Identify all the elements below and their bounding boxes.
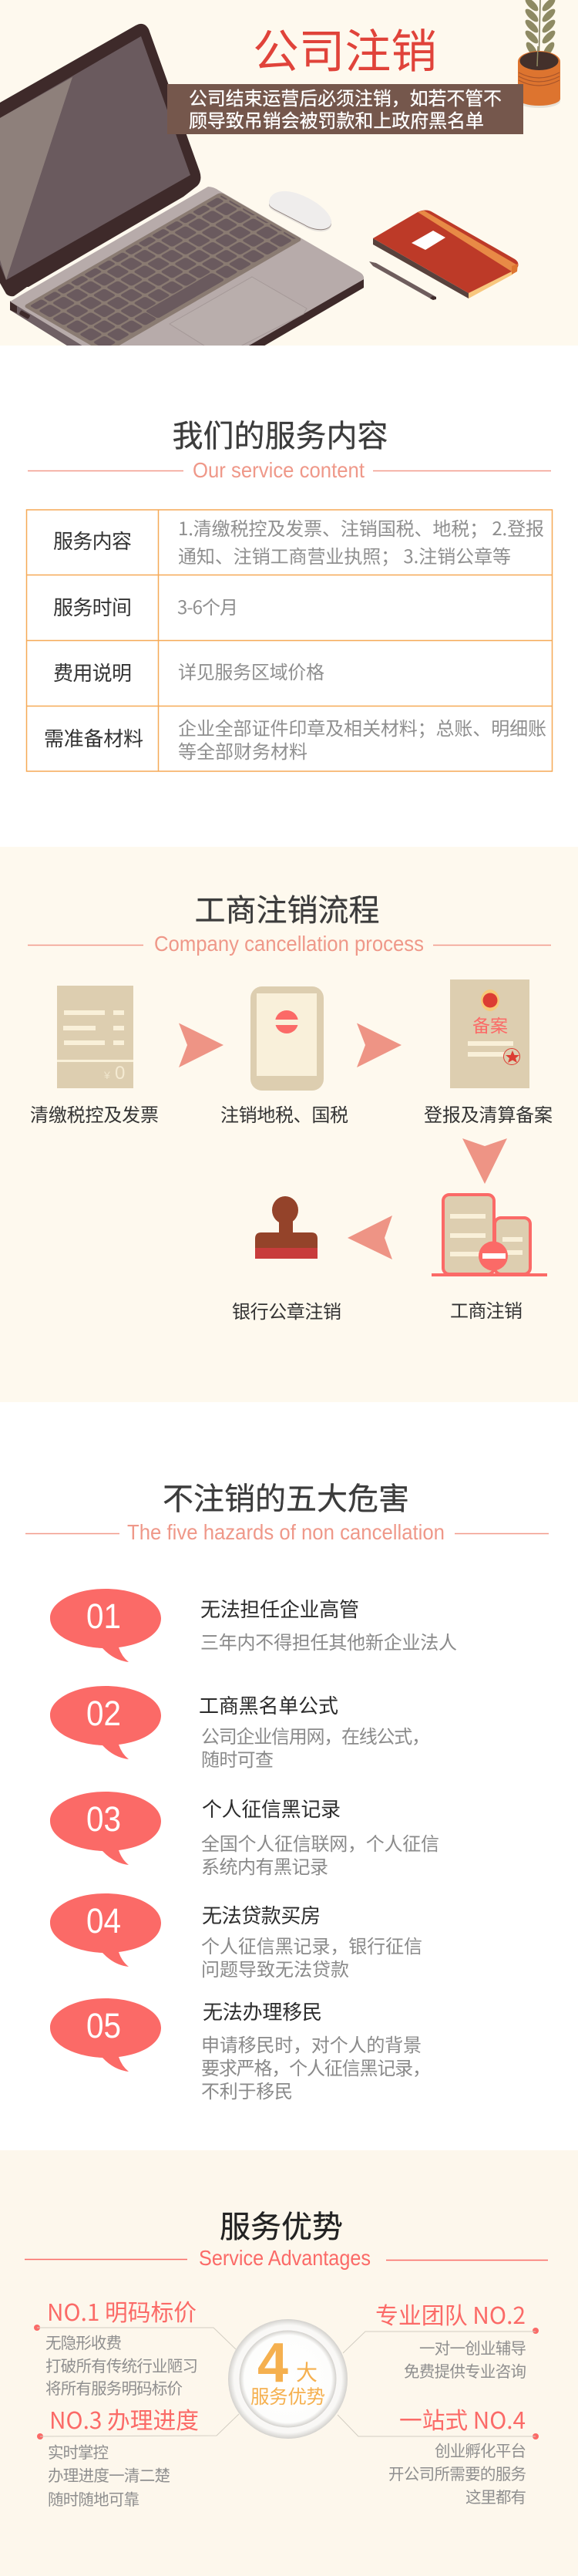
row: service content: 1.清缴税控及发票、注销国税、地税； 2.登报 <box>178 514 544 541</box>
advantage: no.2: 一对一创业辅导 <box>419 2335 526 2359</box>
item 01: 无法担任企业高管 <box>200 1594 359 1623</box>
advantage: no.2: 免费提供专业咨询 <box>404 2359 526 2382</box>
item 05: 无法办理移民 <box>203 1997 322 2025</box>
item 03 <box>50 1792 439 1879</box>
callout: subtitle band <box>167 83 523 134</box>
subheading with rules: Service Advantages <box>199 2246 371 2270</box>
icon: potted plant <box>518 0 560 108</box>
item 04: 个人征信黑记录，银行征信 <box>201 1931 422 1958</box>
subheading with rules: Company cancellation process <box>154 932 424 956</box>
row: fee: 详见服务区域价格 <box>178 657 324 684</box>
item 03: 全国个人征信联网，个人征信 <box>201 1829 439 1856</box>
item 04: 04 <box>86 1901 121 1940</box>
advantage: no.3: 办理进度一清二楚 <box>48 2463 170 2486</box>
advantage: no.3 <box>37 2402 239 2510</box>
subheading with rules: The five hazards of non cancellation <box>127 1520 445 1544</box>
icon: filing document: 备案 <box>472 1011 508 1037</box>
advantage: no.2: 专业团队 NO.2 <box>375 2297 526 2331</box>
row: materials: 需准备材料 <box>44 723 143 752</box>
step label: 清缴税控及发票 <box>30 1100 159 1127</box>
row: materials: 企业全部证件印章及相关材料；总账、明细账 <box>178 713 546 740</box>
panel: hero banner <box>0 0 578 353</box>
item 03: 个人征信黑记录 <box>202 1794 341 1822</box>
callout: subtitle band: 顾导致吊销会被罚款和上政府黑名单 <box>189 106 484 133</box>
title: 公司注销 <box>253 15 437 82</box>
row: service time: 3-6个月 <box>177 592 238 619</box>
icon: tax receipt <box>57 986 133 1088</box>
icon: mouse <box>269 191 331 231</box>
center badge <box>228 2319 348 2439</box>
item 02: 随时可查 <box>201 1745 274 1772</box>
row: fee <box>53 657 324 686</box>
icon: pen <box>369 261 436 300</box>
item 05: 申请移民时，对个人的背景 <box>201 2030 422 2057</box>
row: service content: 通知、注销工商营业执照； 3.注销公章等 <box>178 541 511 568</box>
subheading with rules: Our service content <box>193 458 365 482</box>
panel: service advantages <box>0 2150 578 2576</box>
arrow <box>348 1216 392 1259</box>
advantage: no.1: 无隐形收费 <box>45 2330 122 2353</box>
row: fee: 费用说明 <box>53 658 132 686</box>
row: materials <box>44 713 546 764</box>
advantage: no.1: 打破所有传统行业陋习 <box>45 2353 198 2376</box>
arrow <box>357 1023 402 1067</box>
row: materials: 等全部财务材料 <box>178 737 307 764</box>
item 03: 系统内有黑记录 <box>201 1852 328 1879</box>
icon: company seal <box>255 1196 318 1259</box>
panel: five hazards <box>0 1402 578 2150</box>
advantage: no.1: 将所有服务明码标价 <box>45 2375 183 2399</box>
callout: subtitle band: 公司结束运营后必须注销，如若不管不 <box>189 83 502 110</box>
row: service time <box>53 592 238 621</box>
advantage: no.4: 这里都有 <box>465 2484 526 2507</box>
step label: 登报及清算备案 <box>424 1100 553 1127</box>
advantage: no.3: NO.3 办理进度 <box>49 2402 199 2436</box>
item 01: 三年内不得担任其他新企业法人 <box>200 1627 457 1654</box>
item 05: 不利于移民 <box>201 2076 293 2103</box>
center badge: 服务优势 <box>250 2382 325 2409</box>
center badge: 4 <box>257 2332 288 2394</box>
icon: notebook <box>373 210 518 298</box>
icon: tax receipt: ¥ <box>103 1069 110 1081</box>
row: service content <box>53 514 544 568</box>
item 04: 问题导致无法贷款 <box>201 1954 349 1981</box>
item 02: 工商黑名单公式 <box>199 1691 338 1719</box>
item 04 <box>50 1893 422 1981</box>
heading: 工商注销流程 <box>194 885 379 930</box>
advantage: no.4: 一站式 NO.4 <box>399 2402 526 2436</box>
item 05: 05 <box>86 2006 121 2045</box>
row: service time: 服务时间 <box>53 592 132 621</box>
item 01: 01 <box>86 1597 121 1636</box>
item 05: 要求严格，个人征信黑记录， <box>201 2053 431 2080</box>
center badge: 大 <box>296 2356 318 2387</box>
arrow <box>179 1023 223 1067</box>
advantage: no.2 <box>343 2297 539 2382</box>
heading: 我们的服务内容 <box>173 411 388 456</box>
advantage: no.3: 实时掌控 <box>48 2439 109 2463</box>
item 02 <box>50 1686 430 1772</box>
advantage: no.4 <box>338 2402 539 2507</box>
icon: business building <box>432 1195 547 1276</box>
item 02: 02 <box>86 1694 121 1733</box>
icon: tax phone <box>250 986 324 1091</box>
heading: 不注销的五大危害 <box>163 1474 409 1519</box>
item 05 <box>50 1997 431 2103</box>
service table <box>26 510 552 771</box>
panel: service content <box>0 346 578 847</box>
advantage: no.1: NO.1 明码标价 <box>47 2294 197 2328</box>
item 02: 公司企业信用网，在线公式， <box>201 1721 430 1748</box>
icon: tax receipt: 0 <box>115 1063 125 1084</box>
step label: 银行公章注销 <box>232 1296 341 1323</box>
advantage: no.4: 开公司所需要的服务 <box>388 2461 526 2484</box>
heading: 服务优势 <box>220 2202 343 2247</box>
panel: cancellation process <box>0 847 578 1402</box>
step label: 工商注销 <box>450 1296 523 1323</box>
item 03: 03 <box>86 1799 121 1839</box>
advantage: no.4: 创业孵化平台 <box>435 2438 526 2461</box>
step label: 注销地税、国税 <box>220 1100 348 1127</box>
advantage: no.1 <box>34 2294 236 2399</box>
item 04: 无法贷款买房 <box>202 1900 321 1929</box>
item 01 <box>50 1589 457 1662</box>
arrow <box>462 1138 507 1184</box>
row: service content: 服务内容 <box>53 526 132 555</box>
icon: filing document <box>450 979 529 1088</box>
icon: laptop <box>0 24 364 353</box>
advantage: no.3: 随时随地可靠 <box>48 2487 139 2510</box>
